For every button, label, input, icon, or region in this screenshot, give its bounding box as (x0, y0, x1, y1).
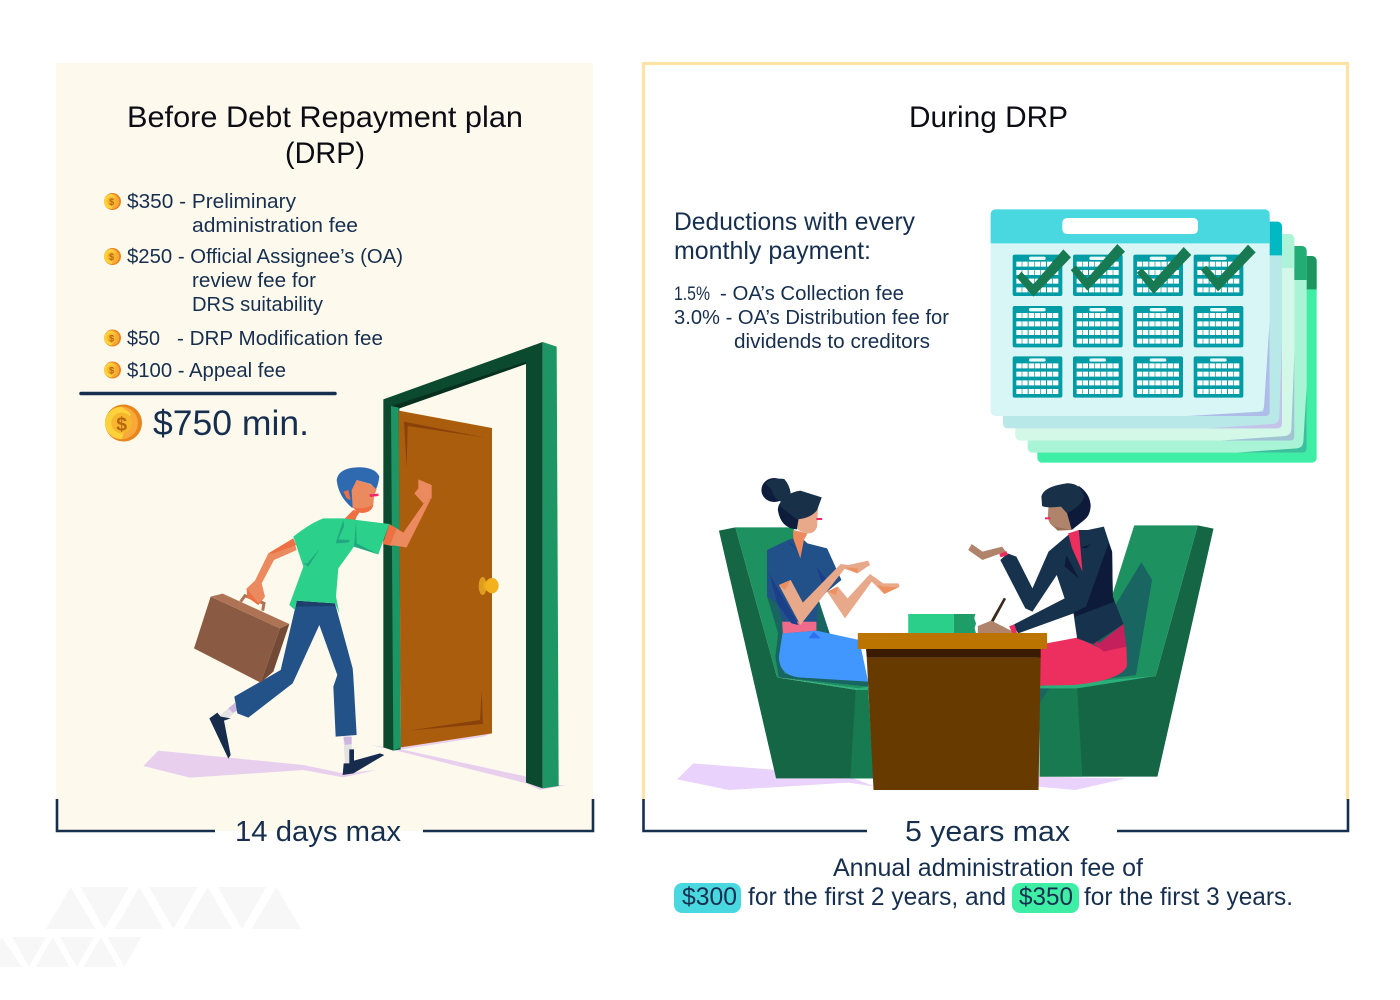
woman: right (968, 483, 1127, 686)
text: monthly deductions: 1.5% (674, 284, 710, 305)
woman: left (761, 478, 900, 682)
text: annual administration fee: for the first 2 years, and (748, 883, 1006, 911)
text: monthly deductions (674, 208, 949, 353)
door frame (383, 342, 559, 788)
text: annual administration fee (674, 854, 1293, 913)
fee list (104, 191, 403, 382)
background triangles (0, 887, 301, 967)
fee: $350 (104, 191, 358, 237)
timeframe bracket: 14 days max: 14 days max (235, 816, 401, 848)
text: monthly deductions: Deductions with every (674, 208, 915, 236)
man (194, 467, 432, 775)
text: monthly deductions: dividends to creditors (734, 331, 930, 353)
text: monthly deductions: 3.0% - OA’s Distribution fee for (674, 307, 949, 329)
books (908, 614, 976, 633)
fee: $250 (104, 246, 403, 316)
check marks (1017, 244, 1256, 297)
fee: $250: review fee for (192, 270, 316, 292)
desk (858, 633, 1047, 790)
back sheets (1003, 222, 1317, 463)
chair: right (1040, 525, 1214, 777)
heading: before DRP: (DRP) (285, 137, 365, 170)
fee: $50: $50 (127, 328, 160, 350)
fee: $100: $100 - Appeal fee (127, 360, 286, 382)
fee: $50: - DRP Modification fee (177, 328, 383, 350)
illustration: stacked calendars (991, 209, 1317, 463)
heading: during DRP: During DRP (909, 101, 1068, 134)
badge: $350: $350 (1019, 883, 1073, 911)
fee: $350: administration fee (192, 215, 358, 237)
panel: during DRP (644, 64, 1348, 800)
fee: $250: DRS suitability (192, 294, 323, 316)
timeframe bracket: 5 years max (644, 799, 1348, 848)
badge: $300: $300 (682, 883, 737, 911)
mini calendars grid (1013, 255, 1243, 398)
total: $750 min: $750 min. (153, 404, 309, 443)
door (399, 411, 499, 747)
panel: before DRP (56, 63, 593, 831)
floor shadows (143, 733, 566, 790)
chair: left (719, 527, 874, 778)
floor shadow (677, 763, 1126, 790)
illustration: two women at a desk (677, 478, 1214, 790)
text: monthly deductions: - OA’s Collection fee (720, 283, 904, 305)
text: annual administration fee: Annual administration fee of (833, 854, 1143, 882)
text: monthly deductions: monthly payment: (674, 237, 871, 265)
heading: before DRP: Before Debt Repayment plan (127, 101, 523, 134)
fee: $350: $350 - Preliminary (127, 191, 296, 213)
timeframe bracket: 5 years max: 5 years max (905, 816, 1071, 848)
illustration: man knocking at door (143, 342, 566, 790)
timeframe bracket: 14 days max (57, 799, 593, 848)
text: annual administration fee: for the first 3 years. (1084, 883, 1293, 911)
heading: before DRP (127, 101, 523, 170)
front sheet (991, 209, 1270, 416)
fee: $250: $250 - Official Assignee’s (OA) (127, 246, 403, 268)
